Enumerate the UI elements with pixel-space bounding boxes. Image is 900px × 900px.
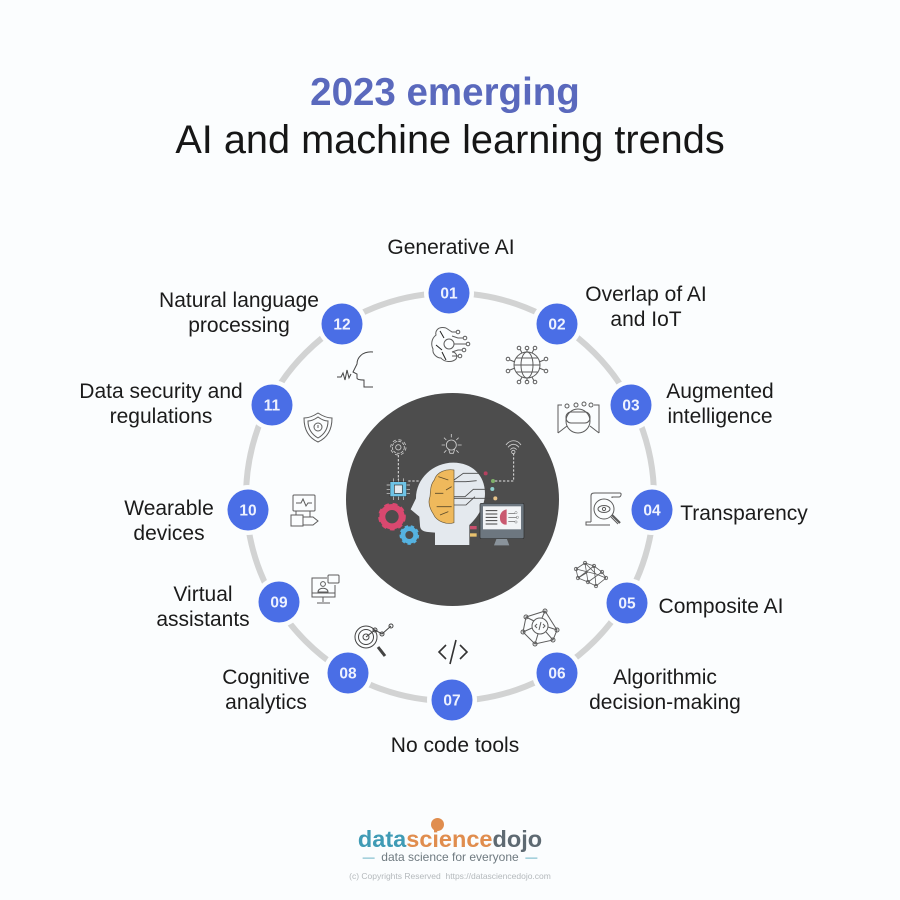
logo xyxy=(358,818,542,864)
icon: wifi xyxy=(506,441,521,454)
icon: security shield xyxy=(304,413,332,442)
label 02 xyxy=(585,283,707,331)
node 02: 02 xyxy=(548,316,566,334)
node 10: 10 xyxy=(239,502,257,520)
node 04: 04 xyxy=(643,502,661,520)
label 10: devices xyxy=(133,522,205,545)
icon: speaking face xyxy=(337,352,373,387)
title: AI and machine learning trends xyxy=(175,118,725,162)
copyright: (c) Copyrights Reserved https://datasciencedojo.com xyxy=(349,871,551,881)
dashed connectors xyxy=(398,453,514,481)
head xyxy=(411,463,485,545)
icon: monitor xyxy=(480,503,524,545)
node 11 xyxy=(247,380,297,430)
node 06 xyxy=(532,648,582,698)
node 04 xyxy=(627,485,677,535)
label 12 xyxy=(159,289,319,337)
label 03 xyxy=(666,380,774,428)
label 03: Augmented xyxy=(666,380,774,403)
icon: chip xyxy=(387,478,410,500)
label 10: Wearable xyxy=(124,497,214,520)
icon: wearable device xyxy=(291,495,318,526)
node 10 xyxy=(223,485,273,535)
icon: virtual assistant monitor xyxy=(312,575,339,603)
icon: IoT globe xyxy=(506,346,548,384)
icon: code tag xyxy=(439,640,467,664)
node 12: 12 xyxy=(333,316,351,334)
label 11 xyxy=(79,380,243,428)
node 08 xyxy=(323,648,373,698)
label 09: Virtual xyxy=(173,583,233,606)
icon: blue gear xyxy=(401,526,418,544)
icon: light bulb xyxy=(442,434,462,453)
label 01: Generative AI xyxy=(387,236,515,259)
central circle xyxy=(346,393,559,606)
node 03: 03 xyxy=(622,398,640,414)
node 11: 11 xyxy=(264,398,281,414)
label 03: intelligence xyxy=(667,405,773,428)
node 07 xyxy=(427,675,477,725)
label 09: assistants xyxy=(156,608,250,631)
numbered nodes xyxy=(223,268,677,725)
icon: augmented reality headset xyxy=(558,402,599,433)
circuit lines xyxy=(435,473,494,515)
label 05: Composite AI xyxy=(659,595,783,618)
node 05: 05 xyxy=(618,596,636,612)
logo dot xyxy=(431,818,444,831)
central illustration: AI head xyxy=(380,434,524,545)
node 05 xyxy=(602,578,652,628)
icon: algorithmic network xyxy=(521,609,559,646)
node 12 xyxy=(317,299,367,349)
icon: cognitive analytics target xyxy=(355,624,393,656)
line icons xyxy=(291,328,621,664)
node 01: 01 xyxy=(440,286,458,302)
ring xyxy=(246,293,654,701)
small stacked bars xyxy=(470,526,477,537)
node 01 xyxy=(424,268,474,318)
label 11: regulations xyxy=(110,405,212,428)
label 11: Data security and xyxy=(79,380,243,403)
node 06: 06 xyxy=(548,666,566,682)
title xyxy=(175,71,725,162)
label 02: and IoT xyxy=(610,308,682,331)
icon: composite network xyxy=(574,561,608,588)
node 03 xyxy=(606,380,656,430)
node 08: 08 xyxy=(339,666,357,682)
label 02: Overlap of AI xyxy=(585,283,707,306)
node 07: 07 xyxy=(443,692,461,710)
node 02 xyxy=(532,299,582,349)
brain xyxy=(429,470,454,523)
icon: transparency document with eye xyxy=(586,493,621,525)
label 07: No code tools xyxy=(391,734,519,757)
label 08: Cognitive xyxy=(222,666,310,689)
icon: outline gear xyxy=(391,440,406,455)
node 09: 09 xyxy=(270,594,288,612)
logo tagline: — data science for everyone — xyxy=(363,850,537,864)
label 08 xyxy=(222,666,310,714)
title: 2023 emerging xyxy=(310,71,580,114)
logo wordmark: datasciencedojo xyxy=(358,826,542,852)
label 06 xyxy=(589,666,741,714)
label 06: Algorithmic xyxy=(613,666,717,689)
label 06: decision-making xyxy=(589,691,741,714)
label 12: Natural language xyxy=(159,289,319,312)
label 08: analytics xyxy=(225,691,307,714)
node 09 xyxy=(254,577,304,627)
label 04: Transparency xyxy=(680,502,808,525)
label 10 xyxy=(124,497,214,545)
label 09 xyxy=(156,583,250,631)
icon: generative AI brain xyxy=(432,328,470,362)
icon: pink gear xyxy=(380,504,404,529)
label 12: processing xyxy=(188,314,290,337)
